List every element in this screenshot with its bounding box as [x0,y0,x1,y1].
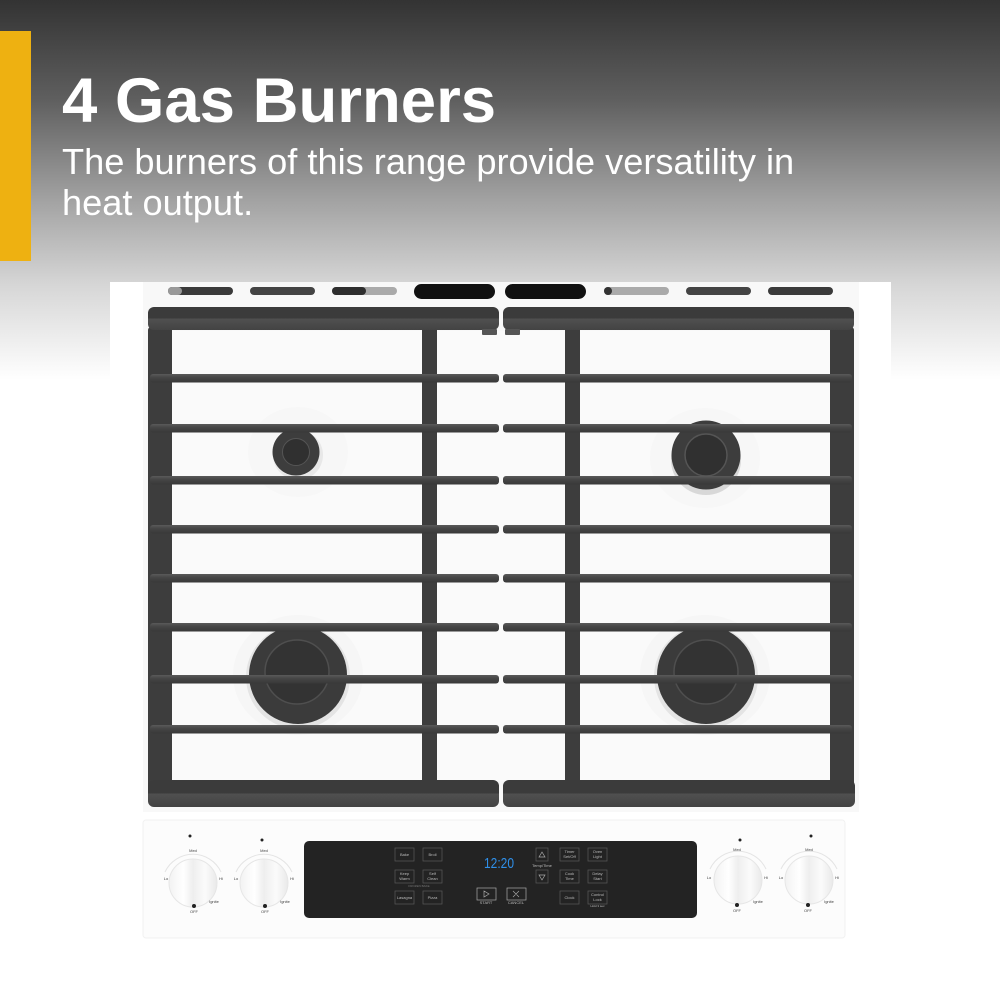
title: 4 Gas Burners [62,66,496,136]
knob: left 1: Ignite [209,899,220,904]
left grate [148,307,499,807]
burner: front left [246,625,350,729]
button labels: Self [429,871,437,876]
button labels: Clock [564,895,575,900]
button labels: Temp/Time [532,863,553,868]
button labels: Start [593,876,603,881]
rear vents [168,284,833,299]
knob: left 2 [234,838,294,914]
button labels: Light [593,854,603,859]
button labels: Control [591,892,604,897]
button labels: Keep [400,871,410,876]
control buttons [395,848,607,904]
button labels: Timer [564,849,575,854]
clock display: 12:20 [484,855,514,872]
cooktop surface [143,282,859,812]
knob group left [164,834,294,914]
knob: right 1: Hi [764,875,768,880]
knob: left 1 [164,834,223,914]
knob: left 2: Ignite [280,899,291,904]
button labels: Hold 3 sec [590,904,605,908]
knob: right 2: Hi [835,875,839,880]
button labels: Oven [593,849,602,854]
knob: right 2: OFF [804,908,813,913]
knob: right 1: Ignite [753,899,764,904]
button labels: Broil [428,852,437,857]
button labels: Lock [593,897,602,902]
white image backdrop [110,282,891,1000]
knob: right 1: Med [733,847,741,852]
button labels: Time [565,876,575,881]
accent bar [0,31,31,261]
knob: left 2: Med [260,848,268,853]
burner: rear left [272,428,323,480]
knob: left 1: OFF [190,909,199,914]
button labels: FROZEN BAKE [408,884,430,888]
knob: right 2: Ignite [824,899,835,904]
oven display panel [304,841,697,918]
button labels: Lasagna [397,895,413,900]
subtitle text: heat output. [62,182,253,223]
knob: right 2: Lo [779,875,784,880]
knob: left 1: Lo [164,876,169,881]
knob: right 2 [779,834,839,913]
knob: right 1: Lo [707,875,712,880]
button labels: Set/Off [563,854,577,859]
knob: right 1: OFF [733,908,742,913]
knob: right 2: Med [805,847,813,852]
subtitle text [62,141,794,223]
knob: left 2: Lo [234,876,239,881]
burner: rear right [671,420,741,495]
knob: right 1 [707,838,768,913]
button labels: Warm [399,876,410,881]
knob: left 2: OFF [261,909,270,914]
control panel fascia [143,820,845,938]
knob: left 1: Med [189,848,197,853]
button labels: START [480,900,493,905]
button labels: CANCEL [508,900,525,905]
knob: left 1: Hi [219,876,223,881]
button labels: Cook [565,871,574,876]
knob: left 2: Hi [290,876,294,881]
burner: front right [654,625,758,729]
button labels: Bake [400,852,410,857]
button labels: Clean [427,876,438,881]
subtitle text: The burners of this range provide versatility in [62,141,794,182]
right grate [503,307,855,807]
button labels: Pizza [428,895,438,900]
button labels: Delay [592,871,603,876]
knob group right [707,834,839,913]
button labels [397,849,605,908]
